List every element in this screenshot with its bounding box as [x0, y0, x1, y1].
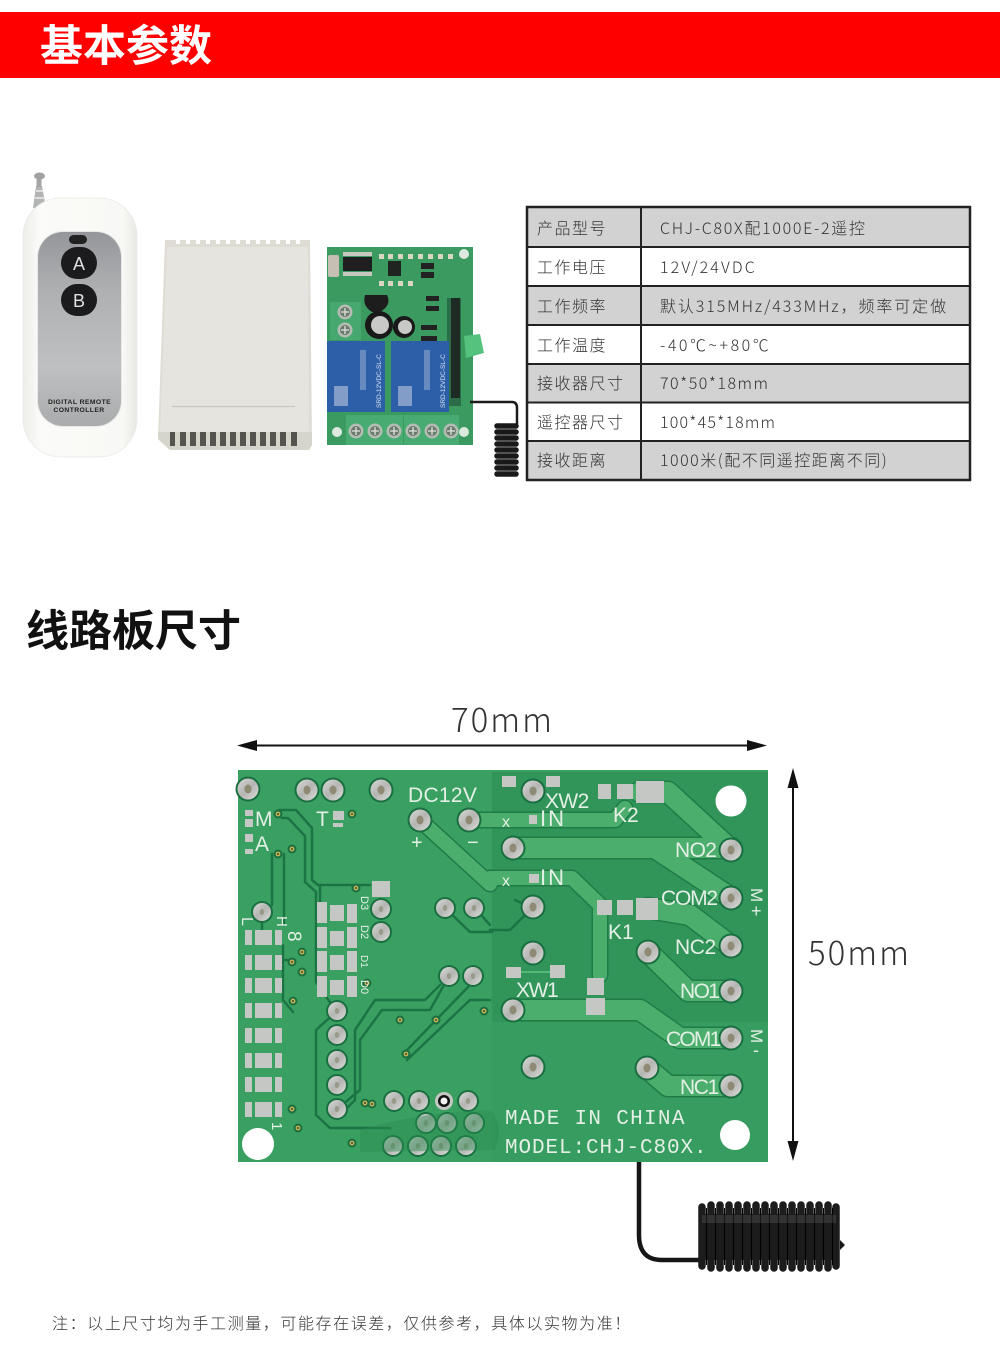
- product photo: remote control: DIGITAL REMOTE: [48, 399, 111, 406]
- silkscreen labels: D0: [358, 980, 370, 994]
- silkscreen labels: -: [753, 1040, 759, 1060]
- silkscreen labels: L: [238, 917, 255, 926]
- dimension: height 50mm: [788, 768, 911, 1161]
- dimension: width 70mm: 70mm: [451, 694, 554, 742]
- parameter table: [527, 207, 970, 480]
- silkscreen labels: D2: [358, 925, 370, 939]
- product photo: remote control: [23, 172, 137, 457]
- silkscreen labels: T: [316, 808, 329, 831]
- title banner: [0, 12, 1000, 78]
- silkscreen labels: M: [747, 1029, 766, 1043]
- table row: working frequency: 工作频率: [537, 293, 607, 317]
- table row: receive distance: [527, 441, 970, 480]
- table row: working temperature: 工作温度: [537, 332, 607, 356]
- silkscreen labels: [238, 784, 766, 1160]
- copper traces: thin: [262, 810, 533, 1128]
- product photo: remote control: A: [73, 254, 85, 274]
- table row: working temperature: [537, 332, 771, 356]
- table row: working voltage: 12V/24VDC: [660, 254, 757, 278]
- circuit board back view: [236, 770, 768, 1162]
- table row: working voltage: [537, 254, 757, 278]
- silkscreen labels: NO1: [680, 980, 719, 1003]
- dimension: height 50mm: 50mm: [808, 927, 911, 975]
- icon: small coiled antenna: [470, 402, 517, 474]
- table row: remote size: [537, 409, 776, 433]
- table row: working frequency: [527, 286, 970, 325]
- silkscreen labels: 8: [283, 931, 304, 942]
- silkscreen labels: K2: [613, 804, 639, 827]
- silkscreen labels: DC12V: [408, 784, 477, 807]
- footnote: 注：以上尺寸均为手工测量，可能存在误差，仅供参考，具体以实物为准！: [52, 1310, 632, 1334]
- silkscreen labels: NC1: [680, 1076, 719, 1099]
- title banner: 基本参数: [40, 12, 212, 74]
- table row: receiver size: [527, 364, 970, 402]
- silkscreen labels: MODEL:CHJ-C80X.: [505, 1137, 708, 1160]
- silkscreen labels: H: [273, 916, 290, 927]
- copper traces: wide: [420, 792, 731, 1086]
- silkscreen labels: M: [747, 888, 766, 902]
- silkscreen labels: D1: [358, 955, 369, 968]
- round through-hole pads: [236, 776, 744, 1157]
- product photo: receiver circuit board: [327, 247, 484, 445]
- silkscreen labels: −: [467, 832, 479, 854]
- silkscreen labels: M: [255, 808, 272, 831]
- heading: board dimensions: 线路板尺寸: [26, 597, 241, 659]
- silkscreen labels: K1: [608, 921, 634, 944]
- dimension: width 70mm: [237, 694, 767, 751]
- silkscreen labels: 1: [268, 1122, 285, 1130]
- table row: working voltage: 工作电压: [537, 254, 607, 278]
- product photo: receiver circuit board: SRD-12VDC-SL-C: [376, 354, 383, 408]
- solder pads: LED and DIP footprint: [245, 776, 664, 1117]
- silkscreen labels: A: [255, 833, 269, 856]
- silkscreen labels: XW1: [516, 979, 558, 1002]
- silkscreen labels: COM2: [661, 887, 717, 910]
- table row: product model: CHJ-C80X配1000E-2遥控: [660, 215, 867, 239]
- table row: remote size: 遥控器尺寸: [537, 409, 625, 433]
- silkscreen labels: +: [751, 901, 762, 921]
- rework scorch mark: [360, 1110, 499, 1152]
- table row: receive distance: 1000米(配不同遥控距离不同): [660, 447, 888, 471]
- table row: receiver size: 70*50*18mm: [660, 370, 769, 394]
- icon: large coiled antenna: [639, 1162, 845, 1268]
- table row: receiver size: 接收器尺寸: [537, 370, 625, 394]
- silkscreen labels: IN: [540, 806, 566, 831]
- table row: working frequency: 默认315MHz/433MHz，频率可定做: [660, 293, 948, 317]
- table row: working temperature: -40℃~+80℃: [660, 332, 771, 356]
- table row: product model: 产品型号: [537, 215, 607, 239]
- silkscreen labels: COM1: [666, 1028, 721, 1051]
- silkscreen labels: +: [411, 832, 423, 854]
- silkscreen labels: MADE IN CHINA: [505, 1108, 686, 1131]
- table row: remote size: 100*45*18mm: [660, 409, 776, 433]
- silkscreen labels: x: [502, 814, 510, 831]
- silkscreen labels: IN: [540, 865, 566, 890]
- product photo: remote control: B: [73, 291, 85, 311]
- product photo: receiver circuit board: SRD-12VDC-SL-C: [440, 354, 447, 408]
- silkscreen labels: D3: [358, 896, 370, 910]
- product photo: remote control: CONTROLLER: [53, 407, 105, 414]
- product photo: receiver enclosure: [158, 238, 312, 450]
- table row: product model: [527, 207, 970, 247]
- mounting holes: [242, 786, 750, 1160]
- table row: receive distance: 接收距离: [537, 447, 607, 471]
- silkscreen labels: x: [502, 873, 510, 890]
- silkscreen labels: NO2: [675, 839, 716, 862]
- icon: antenna: [33, 172, 46, 208]
- silkscreen labels: XW2: [545, 790, 589, 813]
- vias: [274, 810, 488, 1148]
- silkscreen labels: NC2: [675, 936, 716, 959]
